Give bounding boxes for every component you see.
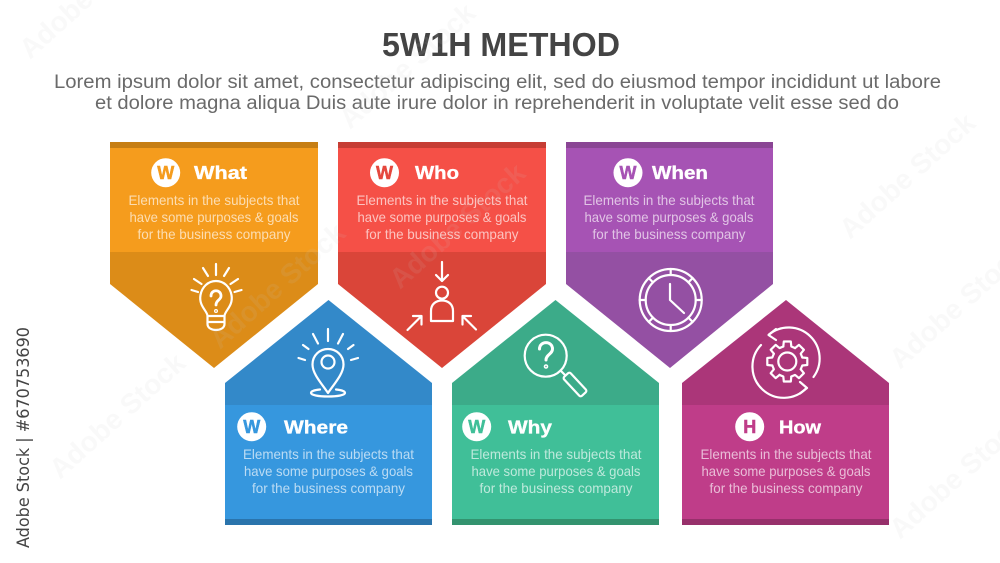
icon: gear with cycle arrows [752,327,820,398]
side credit text: Adobe Stock | #670753690 [14,327,33,548]
subtitle text: Lorem ipsum dolor sit amet, consectetur adipiscing elit, sed do eiusmod tempor incididunt ut labore [54,72,941,93]
text: how: for the business company [710,480,862,496]
icon: magnifier with question mark [525,335,587,397]
watermark: Adobe Stock [43,347,192,484]
text: when: for the business company [592,226,746,242]
subtitle text: et dolore magna aliqua Duis aute irure dolor in reprehenderit in voluptate velit esse sed do [95,93,899,114]
heading: what: What [194,162,247,183]
text: who: for the business company [366,226,518,242]
text: when: Elements in the subjects that [584,192,755,208]
badge: how: H [743,417,756,437]
watermark: Adobe Stock [833,107,982,244]
panel: where [225,300,432,525]
text: how [700,446,872,496]
heading: how: How [779,416,822,438]
text: why: for the business company [480,480,632,496]
badge: when: W [620,163,636,183]
text: where: have some purposes & goals [244,463,413,479]
title: 5W1H METHOD [382,26,620,63]
text: what: have some purposes & goals [130,209,298,225]
badge: what [151,158,180,187]
watermark: Adobe Stock [333,0,482,134]
text: what: Elements in the subjects that [128,192,300,208]
watermark: Adobe Stock [203,217,352,354]
text: why [470,446,642,496]
text: who [356,192,528,242]
badge: how [735,412,764,441]
heading: why: Why [508,416,553,438]
heading: where: Where [284,416,348,438]
badge: where [237,412,266,441]
panel: what [110,142,318,368]
text: when [584,192,755,242]
badge: where: W [243,417,260,437]
text: where [243,446,414,496]
icon: clock [640,269,702,331]
icon: person with arrows [408,262,476,330]
text: what: for the business company [138,226,290,242]
heading: who: Who [415,162,459,183]
text: how: have some purposes & goals [702,463,870,479]
text: where: for the business company [252,480,405,496]
panel: when [566,142,773,368]
text: why: Elements in the subjects that [470,446,642,462]
text: why: have some purposes & goals [472,463,640,479]
text: what [128,192,300,242]
heading: when: When [652,162,708,183]
badge: when [614,158,642,187]
text: when: have some purposes & goals [584,209,754,225]
badge: who [370,158,399,187]
text: where: Elements in the subjects that [243,446,414,462]
panel: who [338,142,546,368]
icon: light bulb with question mark [192,264,242,330]
badge: why: W [468,417,485,437]
badge: what: W [157,163,174,183]
subtitle text [54,72,941,114]
panel: how [682,300,889,525]
badge: why [462,412,491,441]
text: how: Elements in the subjects that [700,446,872,462]
icon: location pin [298,329,358,396]
badge: who: W [376,163,393,183]
panel: why [452,300,659,525]
text: who: have some purposes & goals [358,209,526,225]
text: who: Elements in the subjects that [356,192,528,208]
watermark: Adobe Stock [383,157,532,294]
